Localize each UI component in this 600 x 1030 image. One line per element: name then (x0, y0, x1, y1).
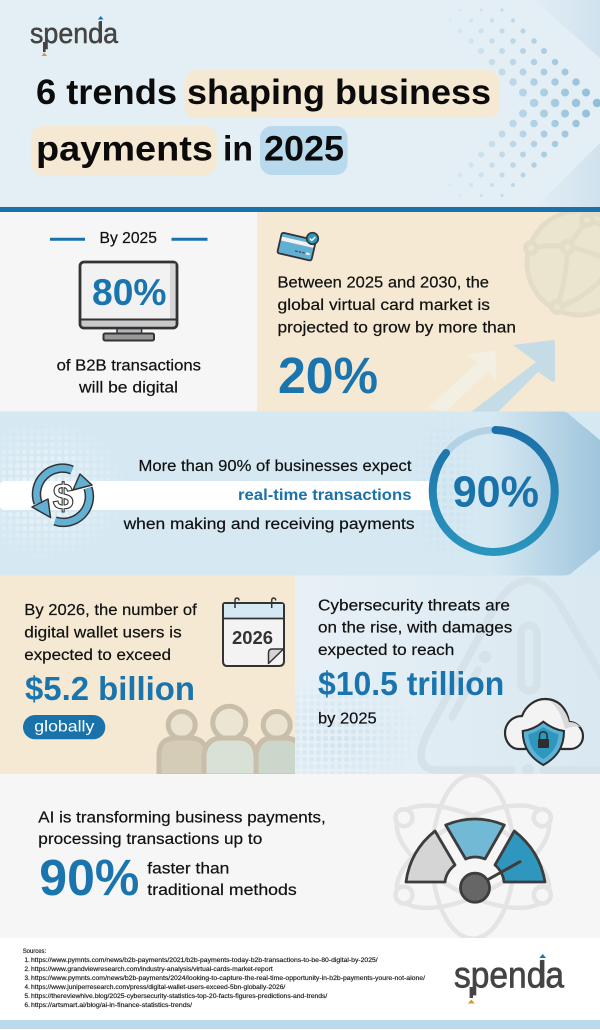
text: cyber threats: on the rise, with damages (318, 620, 513, 637)
icon: calendar 2026 (223, 598, 284, 666)
icon: dollar cycle: $ (53, 476, 74, 517)
icon: globe network (526, 211, 600, 315)
text: AI transformation (38, 809, 326, 848)
panel: real-time transactions (0, 412, 600, 576)
text: AI transformation: processing transactions up to (38, 831, 262, 848)
panel: cybersecurity (295, 576, 600, 774)
sources list: https://artsmart.ai/blog/ai-in-finance-statistics-trends/ (31, 1002, 192, 1009)
text: market projection: Between 2025 and 2030, the (278, 274, 489, 291)
text: wallet users: By 2026, the number of (24, 602, 197, 619)
panel: header (0, 0, 600, 207)
sources list: https://www.grandviewresearch.com/industry-analysis/virtual-cards-market-report (31, 966, 273, 973)
stat: $10.5 trillion: $10.5 trillion (318, 665, 504, 702)
title: in (223, 130, 253, 168)
text: wallet users (24, 602, 197, 664)
panel: digital wallets (0, 576, 304, 776)
sources list: https://www.pymnts.com/news/b2b-payments/2024/looking-to-capture-the-real-time-opportunity-in-b2b-payments-youre-not-alone/ (31, 975, 425, 982)
stat: $5.2 billion: $5.2 billion (25, 670, 195, 707)
title: shaping business (187, 73, 491, 112)
icon: monitor (80, 262, 177, 340)
text: market projection (278, 274, 516, 337)
sources list: https://www.pymnts.com/news/b2b-payments/2021/b2b-payments-today-b2b-transactions-to-be-80-digital-by-2025/ (31, 957, 378, 964)
text: AI transformation: AI is transforming business payments, (38, 809, 326, 826)
text: market projection: global virtual card market is (278, 297, 490, 314)
icon: dollar cycle (32, 468, 92, 522)
sources list: 5. (24, 993, 30, 1000)
text: real-time expectation: real-time transactions (238, 487, 412, 504)
icon: cloud shield (505, 699, 583, 765)
text: faster than traditional methods: faster than (147, 860, 229, 877)
sources list (23, 948, 425, 1009)
icon: growth arrows (428, 340, 555, 412)
panel: 80% digital B2B (0, 212, 257, 412)
caption: B2B transactions: of B2B transactions (57, 358, 201, 375)
text: wallet users: digital wallet users is (24, 624, 182, 641)
title: 6 trends (36, 73, 177, 112)
sources list: https://thereviewhive.blog/2025-cybersecurity-statistics-top-20-facts-figures-predictions-and-trends/ (31, 993, 328, 1000)
text: cyber threats: Cybersecurity threats are (318, 598, 510, 615)
stat: 90% faster: 90% (39, 849, 139, 906)
pill: globally: globally (34, 719, 94, 736)
pill: globally (23, 715, 105, 739)
sources list: 3. (24, 975, 30, 982)
text: real-time expectation (122, 458, 415, 533)
title: 2025 (264, 130, 344, 168)
panel: footer (0, 938, 600, 1029)
text: by 2025: by 2025 (318, 710, 377, 727)
text: wallet users: expected to exceed (24, 647, 171, 664)
text: faster than traditional methods (147, 860, 297, 899)
caption: B2B transactions: will be digital (78, 380, 178, 397)
text: cyber threats (318, 598, 513, 659)
icon: people (159, 706, 304, 776)
sources list: Sources: (23, 948, 46, 955)
label: By 2025: By 2025 (100, 230, 157, 247)
sources list: 2. (24, 966, 30, 973)
text: real-time expectation: when making and receiving payments (122, 516, 415, 533)
title: payments (36, 130, 213, 168)
stat: 20%: 20% (278, 347, 378, 404)
icon: atom orbits (393, 774, 553, 938)
caption: B2B transactions (57, 358, 201, 397)
text: faster than traditional methods: traditional methods (147, 882, 297, 899)
sources list: https://www.juniperresearch.com/press/digital-wallet-users-exceed-5bn-globally-2026/ (31, 984, 286, 991)
sources list: 1. (24, 957, 30, 964)
icon: warning triangle (418, 577, 536, 774)
panel: virtual card market (257, 211, 600, 412)
panel: AI payments (0, 774, 600, 939)
text: real-time expectation: More than 90% of businesses expect (138, 458, 412, 475)
sources list: 6. (24, 1002, 30, 1009)
icon: speed gauge (406, 819, 545, 902)
text: cyber threats: expected to reach (318, 642, 454, 659)
logo: spenda: spenda (30, 18, 119, 50)
title (31, 70, 500, 175)
stat: 80%: 80% (92, 272, 166, 313)
text: market projection: projected to grow by more than (278, 320, 516, 337)
white band (0, 481, 432, 510)
chart: 90% ring: 90% (453, 468, 539, 517)
sources list: 4. (24, 984, 30, 991)
icon: virtual card (277, 232, 318, 261)
chart: 90% ring (433, 430, 555, 552)
icon: calendar 2026: 2026 (232, 627, 273, 648)
logo: spenda footer: spenda (454, 955, 564, 996)
